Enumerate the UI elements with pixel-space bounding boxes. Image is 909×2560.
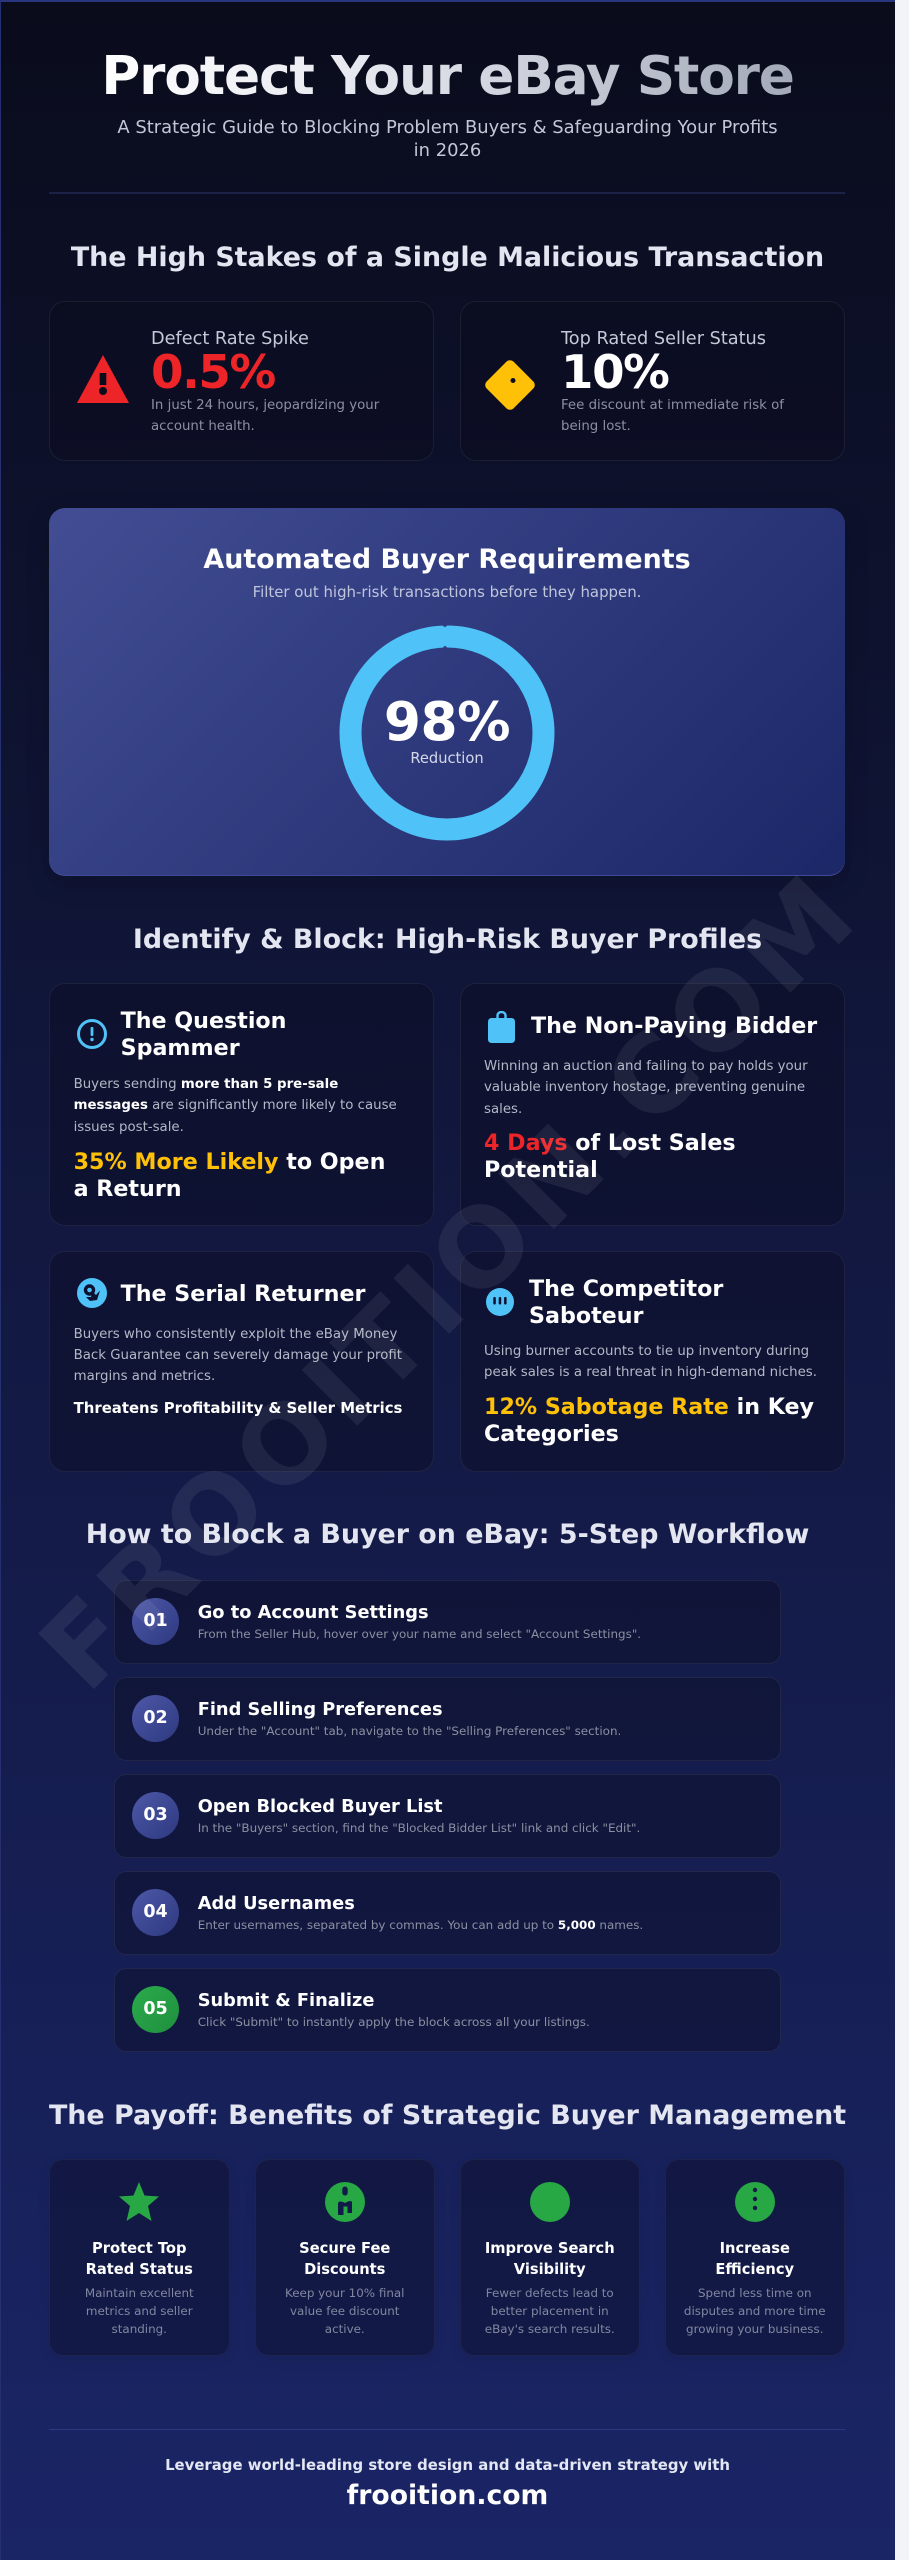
step number	[132, 1889, 179, 1936]
profile statistic: 4 Days of Lost Sales	[484, 1130, 736, 1156]
step 3	[114, 1774, 780, 1858]
subtitle: in 2026	[414, 140, 481, 161]
panel: automated buyer requirements	[49, 508, 845, 876]
benefit description: active.	[325, 2322, 365, 2336]
profile statistic: Potential	[484, 1157, 598, 1183]
footer tagline: Leverage world-leading store design and data-driven strategy with	[165, 2456, 730, 2474]
step number: 04	[143, 1902, 168, 1922]
benefit description: Fewer defects lead to	[486, 2286, 614, 2300]
benefit description: Spend less time on	[698, 2286, 812, 2300]
profile name: Saboteur	[529, 1303, 643, 1329]
benefit title: Visibility	[514, 2260, 586, 2278]
step title: Go to Account Settings	[198, 1602, 429, 1623]
profile name	[120, 1008, 286, 1061]
benefit title	[715, 2240, 794, 2278]
benefit title	[485, 2240, 615, 2278]
benefit description: value fee discount	[290, 2304, 399, 2318]
profile statistic	[74, 1149, 385, 1202]
stat value: 0.5%	[151, 346, 275, 400]
panel: question spammer	[49, 983, 434, 1226]
donut chart: 98% reduction	[340, 626, 554, 840]
footer brand: frooition.com	[347, 2480, 548, 2511]
step description: Click "Submit" to instantly apply the block across all your listings.	[198, 2014, 590, 2028]
profile statistic	[484, 1394, 814, 1447]
heading: high stakes: The High Stakes of a Single Malicious Transaction	[71, 242, 824, 272]
profile statistic: Categories	[484, 1421, 619, 1447]
watermark: FROOITION.COM	[16, 848, 883, 1714]
benefit title	[299, 2240, 390, 2278]
icon: shopping bag	[488, 1011, 515, 1043]
stat label: Top Rated Seller Status	[561, 328, 766, 348]
profile description: Buyers sending more than 5 pre-sale	[74, 1077, 338, 1092]
profile description	[74, 1077, 397, 1135]
step number: 03	[143, 1805, 168, 1825]
icon: star	[119, 2182, 159, 2221]
step 4	[114, 1870, 780, 1954]
panel: improve search visibility	[460, 2159, 640, 2356]
subtitle: A Strategic Guide to Blocking Problem Buyers & Safeguarding Your Profits	[117, 117, 778, 138]
profile description: sales.	[484, 1102, 522, 1117]
benefit description: standing.	[112, 2322, 167, 2336]
panel title: Automated Buyer Requirements	[203, 544, 691, 575]
step number	[132, 1986, 179, 2033]
panel: non-paying bidder	[460, 983, 845, 1226]
profile description: valuable inventory hostage, preventing genuine	[484, 1080, 805, 1095]
benefit description: better placement in	[491, 2304, 609, 2318]
chart value: 98%	[384, 690, 510, 752]
step title: Open Blocked Buyer List	[198, 1796, 443, 1816]
icon: return arrow badge	[77, 1278, 107, 1308]
profile name: The Non-Paying Bidder	[531, 1013, 817, 1039]
icon: amber diamond tag	[485, 360, 535, 410]
icon: exclamation ring	[77, 1019, 107, 1049]
benefit description: Keep your 10% final	[285, 2286, 404, 2300]
panel: competitor saboteur	[460, 1251, 845, 1472]
stat description	[151, 398, 380, 434]
profile description: Using burner accounts to tie up inventory during	[484, 1344, 809, 1359]
panel: secure fee discounts	[254, 2159, 435, 2356]
profile statistic	[484, 1130, 736, 1183]
profile statistic: 12% Sabotage Rate in Key	[484, 1394, 814, 1420]
step 5	[114, 1968, 780, 2052]
panel: serial returner	[49, 1251, 434, 1472]
profile statistic: 35% More Likely to Open	[74, 1149, 385, 1175]
benefit description: growing your business.	[686, 2322, 823, 2336]
stat value: 10%	[561, 346, 668, 400]
step 2	[114, 1677, 780, 1761]
step description: Under the "Account" tab, navigate to the "Selling Preferences" section.	[198, 1724, 621, 1738]
benefit title: Rated Status	[86, 2260, 193, 2278]
panel subtitle: Filter out high-risk transactions before they happen.	[253, 583, 641, 601]
benefit title: Discounts	[304, 2260, 385, 2278]
panel: top rated seller stat	[460, 301, 845, 461]
title: Protect Your eBay Store	[101, 44, 794, 107]
icon: storefront badge	[325, 2182, 365, 2222]
profile name: The Question	[121, 1008, 286, 1034]
profile description: Buyers who consistently exploit the eBay Money	[74, 1327, 397, 1342]
step number: 01	[143, 1611, 168, 1631]
stat description: being lost.	[561, 419, 631, 434]
icon: vertical dots	[735, 2182, 775, 2222]
chart caption: Reduction	[410, 750, 484, 767]
profile name: The Serial Returner	[121, 1281, 365, 1307]
panel: defect rate stat	[49, 301, 434, 461]
profile name: The Competitor	[529, 1276, 723, 1302]
step title: Add Usernames	[198, 1892, 355, 1914]
benefit description: metrics and seller	[86, 2304, 193, 2318]
benefit description: eBay's search results.	[485, 2322, 615, 2336]
icon: warning triangle	[77, 355, 129, 403]
benefit title: Improve Search	[485, 2240, 615, 2256]
stat label: Defect Rate Spike	[151, 328, 309, 348]
profile statistic: Threatens Profitability & Seller Metrics	[74, 1399, 402, 1417]
profile description	[74, 1327, 402, 1384]
profile description: peak sales is a real threat in high-demand niches.	[484, 1365, 817, 1380]
step title: Submit & Finalize	[198, 1990, 374, 2010]
profile description	[484, 1344, 817, 1380]
step description: Enter usernames, separated by commas. You can add up to 5,000 names.	[198, 1918, 643, 1932]
benefit description	[684, 2286, 826, 2336]
panel: protect top rated status	[49, 2159, 230, 2356]
profile description: Back Guarantee can severely damage your profit	[74, 1348, 402, 1363]
stat description	[561, 398, 784, 434]
step description: From the Seller Hub, hover over your name and select "Account Settings".	[198, 1627, 641, 1641]
benefit title: Protect Top	[92, 2240, 186, 2256]
icon: green circle	[530, 2182, 570, 2222]
profile description: issues post-sale.	[74, 1120, 184, 1135]
step number: 05	[143, 1999, 168, 2019]
benefit description	[485, 2286, 615, 2336]
stat description: Fee discount at immediate risk of	[561, 398, 784, 412]
benefit title: Secure Fee	[299, 2240, 390, 2256]
profile description	[484, 1059, 808, 1117]
stat description: In just 24 hours, jeopardizing your	[151, 398, 379, 412]
stat description: account health.	[151, 419, 255, 434]
benefit description	[85, 2286, 194, 2336]
step number	[132, 1695, 179, 1742]
profile description: messages are significantly more likely to cause	[74, 1098, 397, 1113]
profile description: margins and metrics.	[74, 1369, 215, 1384]
benefit title	[86, 2240, 193, 2278]
profile name: Spammer	[121, 1035, 240, 1061]
panel: increase efficiency	[664, 2159, 845, 2356]
benefit title: Efficiency	[715, 2260, 794, 2278]
benefit description	[285, 2286, 404, 2336]
benefit description: Maintain excellent	[85, 2286, 194, 2300]
step number: 02	[143, 1708, 168, 1728]
profile description: Winning an auction and failing to pay holds your	[484, 1059, 808, 1074]
subtitle	[117, 117, 778, 161]
profile statistic: a Return	[74, 1176, 182, 1202]
profile name	[529, 1276, 724, 1329]
heading: benefits: The Payoff: Benefits of Strategic Buyer Management	[49, 2100, 846, 2131]
step number	[132, 1598, 179, 1645]
heading: workflow: How to Block a Buyer on eBay: 5-Step Workflow	[86, 1519, 809, 1550]
benefit title: Increase	[720, 2240, 790, 2256]
step number	[132, 1792, 179, 1839]
icon: three bars badge	[486, 1288, 514, 1316]
step title: Find Selling Preferences	[198, 1699, 443, 1720]
step description: In the "Buyers" section, find the "Blocked Bidder List" link and click "Edit".	[198, 1820, 640, 1834]
heading: buyer profiles: Identify & Block: High-Risk Buyer Profiles	[133, 924, 762, 954]
step 1	[114, 1580, 780, 1664]
benefit description: disputes and more time	[684, 2304, 826, 2318]
